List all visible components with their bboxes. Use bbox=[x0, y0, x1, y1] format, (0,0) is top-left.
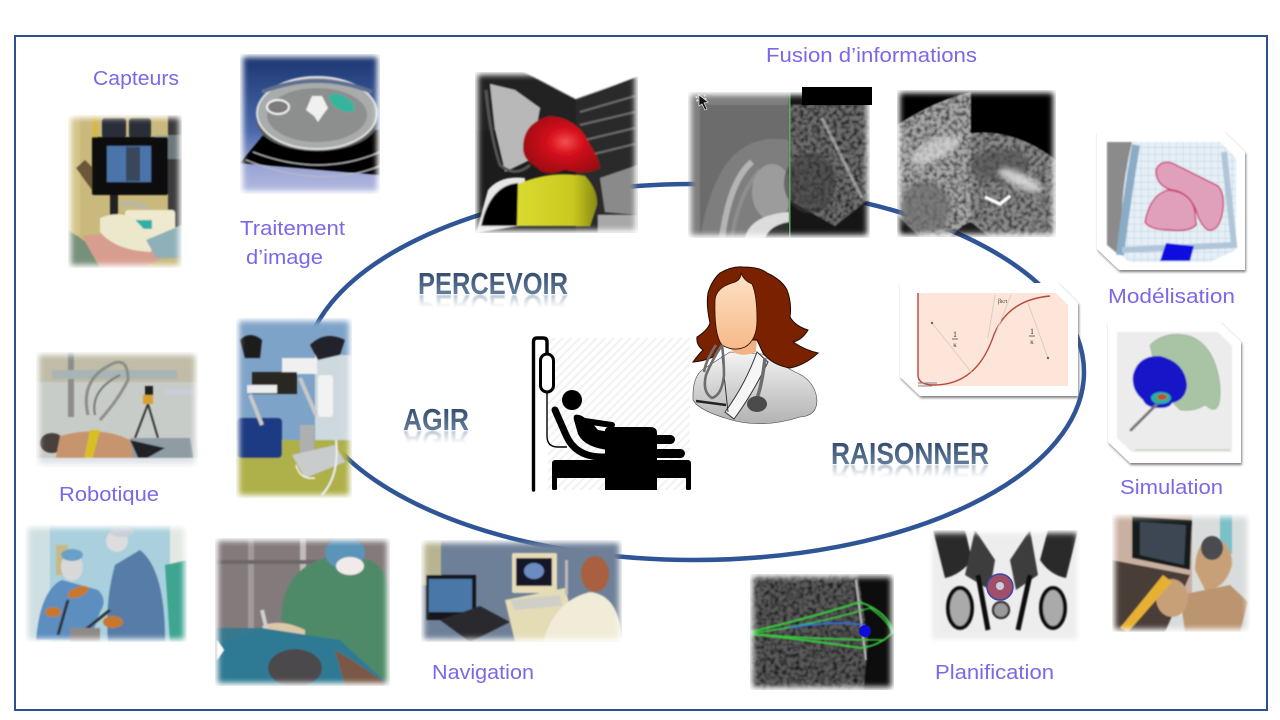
icon: doctor avatar bbox=[693, 267, 818, 424]
heading: RAISONNER: RAISONNER bbox=[831, 458, 989, 493]
label: Simulation: Simulation bbox=[1120, 477, 1223, 499]
cycle ellipse bbox=[304, 184, 1084, 560]
photo: surgeon in green gown bbox=[215, 537, 390, 687]
label: Planification: Planification bbox=[935, 662, 1054, 684]
simulation render bbox=[1117, 332, 1232, 452]
heading: PERCEVOIR: PERCEVOIR bbox=[418, 266, 568, 301]
label: Fusion d'informations: Fusion d’informations bbox=[766, 45, 977, 67]
heading: PERCEVOIR bbox=[418, 266, 568, 323]
photo: operating-room robot bbox=[236, 318, 352, 498]
heading: AGIR bbox=[403, 402, 469, 459]
label: Capteurs: Capteurs bbox=[93, 68, 179, 90]
heading: AGIR: AGIR bbox=[403, 424, 469, 459]
photo: robotic needle arm on patient bbox=[36, 352, 198, 467]
photo: two surgeons bbox=[25, 525, 187, 642]
photo: navigation workstation bbox=[421, 540, 622, 642]
panel: simulation card bbox=[1108, 322, 1241, 463]
curvature chart: βκπ bbox=[998, 299, 1007, 305]
curvature chart: κ bbox=[1030, 338, 1034, 346]
photo: pelvic MRI planning bbox=[929, 530, 1080, 642]
heading: PERCEVOIR: PERCEVOIR bbox=[418, 288, 568, 323]
panel: curvature diagram card bbox=[900, 283, 1078, 396]
photo: capteurs ultrasound bbox=[68, 115, 182, 268]
label: Traitement d'image: d’image bbox=[246, 247, 323, 269]
photo: haptic simulator bbox=[1112, 514, 1250, 632]
curvature chart: κ bbox=[953, 341, 957, 349]
photo: 3D organ fusion bbox=[475, 70, 640, 233]
photo: CT scan slice bbox=[240, 54, 380, 194]
panel: model card bbox=[1097, 132, 1245, 270]
photo: ultrasound fusion bbox=[897, 90, 1056, 237]
black redaction bar bbox=[802, 87, 872, 105]
label: Navigation: Navigation bbox=[432, 662, 534, 684]
curvature chart bbox=[918, 293, 1068, 386]
photo: needle ultrasound path bbox=[750, 574, 894, 690]
label: Robotique: Robotique bbox=[59, 484, 159, 506]
curvature chart: 1 bbox=[953, 330, 957, 339]
icon: patient in bed with IV bbox=[534, 338, 691, 490]
icon: cursor sparkle bbox=[696, 94, 708, 110]
heading: AGIR: AGIR bbox=[403, 402, 469, 437]
model mesh image bbox=[1107, 142, 1236, 262]
label: Modélisation: Modélisation bbox=[1108, 286, 1235, 308]
photo: MRI ultrasound fusion bbox=[688, 92, 870, 238]
label: Traitement d'image: Traitement bbox=[240, 218, 345, 240]
label: Traitement d'image bbox=[240, 218, 345, 269]
curvature chart: 1 bbox=[1030, 327, 1034, 336]
heading: RAISONNER bbox=[831, 436, 989, 493]
heading: RAISONNER: RAISONNER bbox=[831, 436, 989, 471]
